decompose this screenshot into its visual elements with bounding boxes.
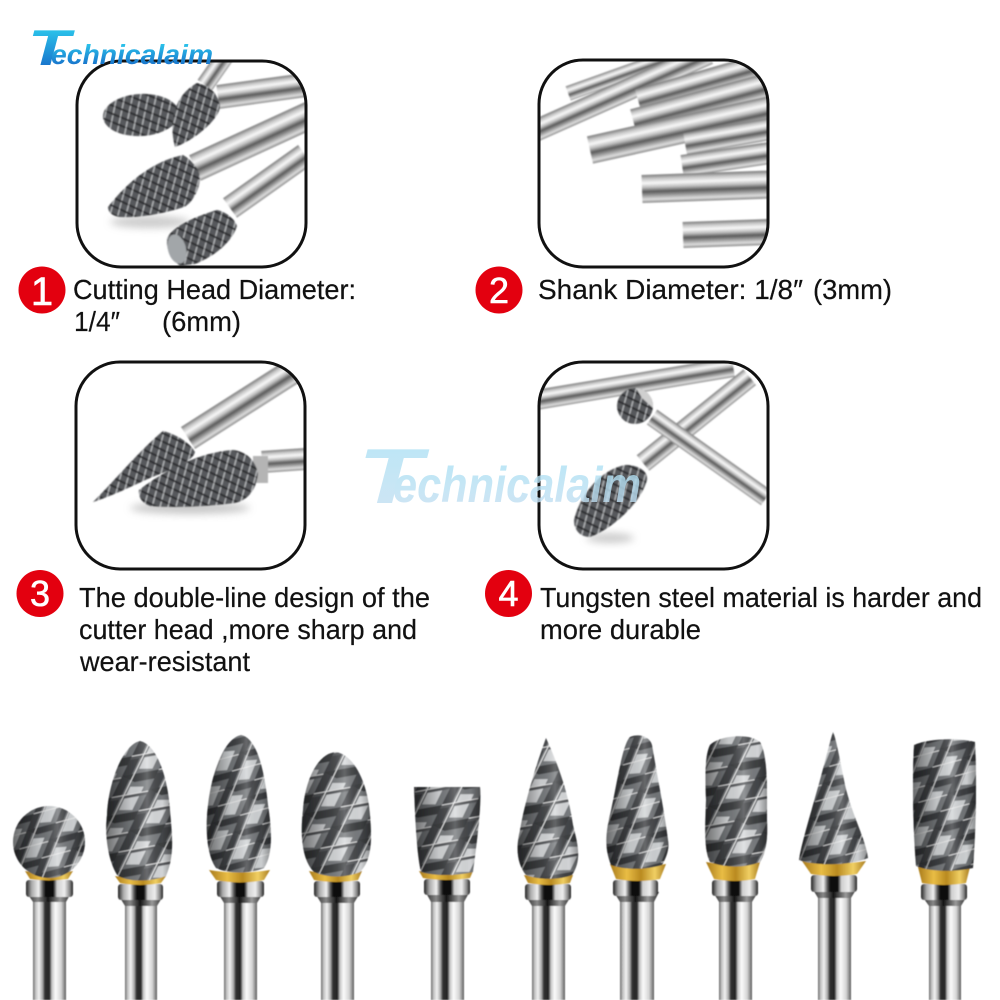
panel: cutting head photo (77, 47, 316, 267)
badge: number 4: 4 (498, 573, 519, 614)
caption: cutting head diameter: Cutting Head Diameter: (73, 274, 356, 305)
burr 8: ball-nose cylinder (705, 736, 767, 1000)
caption: cutting head diameter: (6mm) (162, 306, 241, 337)
bit: cylinder head (167, 210, 237, 266)
badge: number 2: 2 (489, 270, 509, 311)
caption: tungsten steel: more durable (540, 614, 701, 645)
caption: double-line design: The double-line design of the (79, 582, 430, 613)
caption: cutting head diameter: 1/4″ (74, 306, 120, 337)
burr 9: cone (799, 732, 868, 1000)
burr 10: cylinder (913, 739, 976, 1000)
panel: double-line cutter photo (76, 355, 309, 569)
bit: flame head (108, 155, 200, 217)
logo: center watermark: echnicalaim (393, 457, 641, 513)
caption: shank diameter: Shank Diameter: 1/8″ (538, 274, 803, 305)
caption: tungsten steel: Tungsten steel material is harder and (540, 582, 982, 613)
badge: number 2 (476, 266, 522, 314)
logo: top-left brand: echnicalaim (51, 39, 213, 70)
logo: center watermark: T (358, 432, 431, 520)
bit: oval head (102, 92, 180, 138)
caption: tungsten steel (540, 582, 982, 645)
caption: shank diameter: (3mm) (813, 274, 892, 305)
badge: number 3: 3 (30, 573, 50, 614)
bit: pointed head (93, 431, 195, 502)
burr 7: round-nose cone (606, 735, 668, 1000)
bit: tree head (172, 83, 220, 147)
badge: number 3 (16, 570, 64, 617)
panel: tungsten steel photo (534, 357, 771, 569)
logo: top-left brand: T (28, 20, 76, 76)
bit: flame head (139, 450, 258, 507)
badge: number 4 (485, 570, 532, 617)
caption: double-line design: wear-resistant (79, 646, 250, 677)
product row: ten carbide burrs (13, 732, 976, 1000)
caption: double-line design (79, 582, 430, 677)
burr 6: pointed flame (518, 738, 578, 1000)
logo: center watermark (358, 432, 641, 520)
panel: shank rods photo (538, 58, 770, 268)
burr 1: ball (13, 806, 85, 1000)
burr 4: oval (302, 752, 371, 1000)
bit: ball head (617, 388, 653, 424)
badge: number 1 (18, 266, 66, 314)
burr 5: inverted cone (414, 787, 480, 1000)
logo: top-left brand (28, 20, 213, 76)
bit: oval head (574, 465, 647, 537)
bit: shanks (188, 62, 304, 218)
caption: cutting head diameter (73, 274, 356, 337)
badge: number 1: 1 (31, 270, 53, 314)
caption: double-line design: cutter head ,more sharp and (79, 614, 417, 645)
shadow under cutter heads (110, 216, 190, 228)
burr 3: flame tall (207, 735, 271, 1000)
burr 2: flame (106, 741, 172, 1000)
